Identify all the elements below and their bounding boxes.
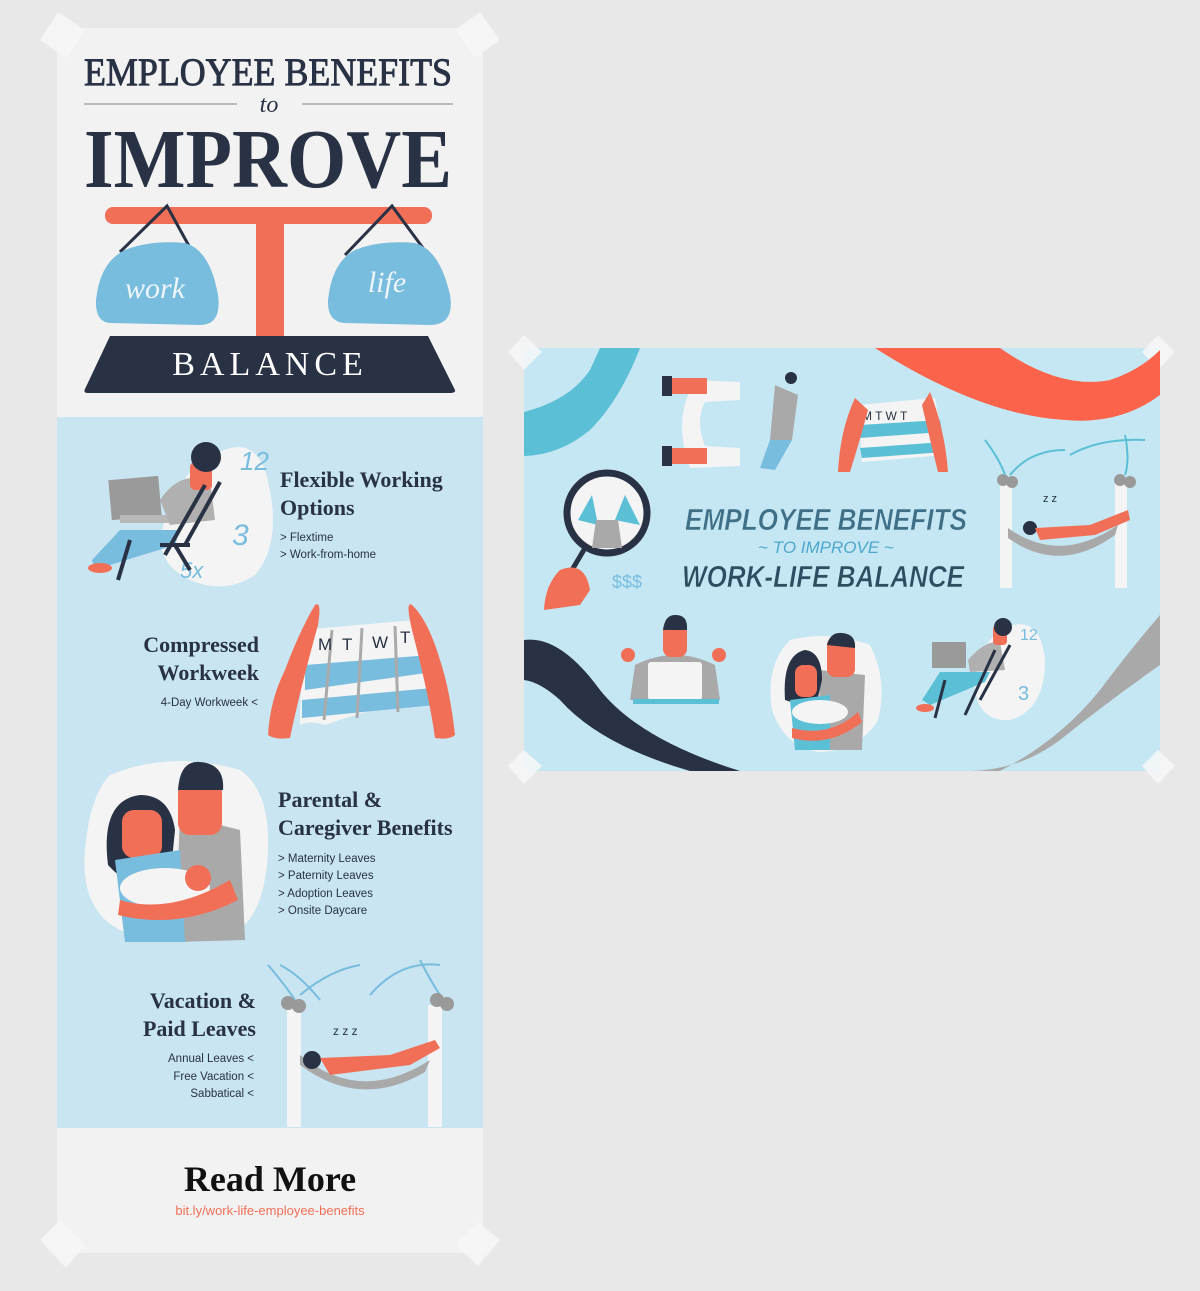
icon: man in chair: 12 [1020,627,1038,644]
icon: family [770,633,882,752]
section: parental benefits: > Onsite Daycare [278,905,367,917]
section: parental benefits: > Paternity Leaves [278,870,374,882]
icon: calendar in hands: M [318,635,332,654]
section: flexible working [88,442,443,586]
icon: calendar hands: M T W T [862,409,908,423]
icon: calendar hands [838,392,948,472]
section: vacation: Free Vacation < [173,1071,254,1083]
icon: calendar in hands: W [372,633,388,652]
section: vacation: Annual Leaves < [168,1053,254,1065]
title: EMPLOYEE BENEFITS [84,51,452,94]
section: compressed workweek: Compressed [143,632,259,657]
icon: hammock between palms: z z z [333,1024,358,1038]
icon: calendar in hands: T [400,628,410,647]
title: to [260,92,278,118]
icon: magnifier [544,473,647,610]
title: right poster: ~ TO IMPROVE ~ [758,538,894,557]
icon: hammock [985,435,1145,588]
title: right poster: WORK-LIFE BALANCE [682,559,965,594]
section: parental benefits: > Maternity Leaves [278,853,376,865]
scale: balance illustration: work [125,272,186,305]
icon: man in chair [916,618,1045,720]
section: vacation [143,960,454,1127]
title [84,51,453,206]
read more [175,1159,365,1218]
icon: calendar in hands [268,604,455,739]
scale: balance illustration: BALANCE [172,346,368,383]
section: parental benefits [84,761,453,942]
section: parental benefits: Parental & [278,787,382,812]
icon: man in chair: 3 [1018,683,1029,705]
panel: right poster [508,335,1175,784]
section: compressed workweek: Workweek [158,660,260,685]
icon: calendar in hands: T [342,635,352,654]
panel: left poster [40,12,500,1268]
title: right poster: EMPLOYEE BENEFITS [685,502,967,537]
section: parental benefits: > Adoption Leaves [278,888,373,900]
title: right poster [682,502,967,594]
icon: man in chair with laptop [88,442,273,586]
icon: man in chair with laptop: 3 [232,519,249,552]
icon: hammock: z z [1043,493,1057,505]
section: vacation: Vacation & [150,988,256,1013]
icon: family [84,761,268,942]
read more: Read More [184,1159,356,1199]
section: parental benefits: Caregiver Benefits [278,815,453,840]
icon: man in chair with laptop: 12 [240,446,269,476]
icon: magnifier: $$$ [612,572,642,592]
section: flexible working: > Work-from-home [280,549,376,561]
bullets: > Flextime [280,532,333,544]
heading: Flexible Working [280,467,443,492]
scale: balance illustration [84,206,455,393]
icon: cheering man [621,615,726,704]
read more: bit.ly/work-life-employee-benefits [175,1203,365,1218]
section: compressed workweek: 4-Day Workweek < [161,697,258,709]
scale: balance illustration: life [368,266,406,299]
section: compressed workweek [143,604,455,739]
section: flexible working: Options [280,495,355,520]
icon: magnet [662,372,798,470]
section: vacation: Sabbatical < [190,1088,254,1100]
icon: hammock between palms [268,960,454,1127]
title: IMPROVE [84,113,452,206]
section: vacation: Paid Leaves [143,1016,256,1041]
icon: man in chair with laptop: 5x [180,558,204,583]
